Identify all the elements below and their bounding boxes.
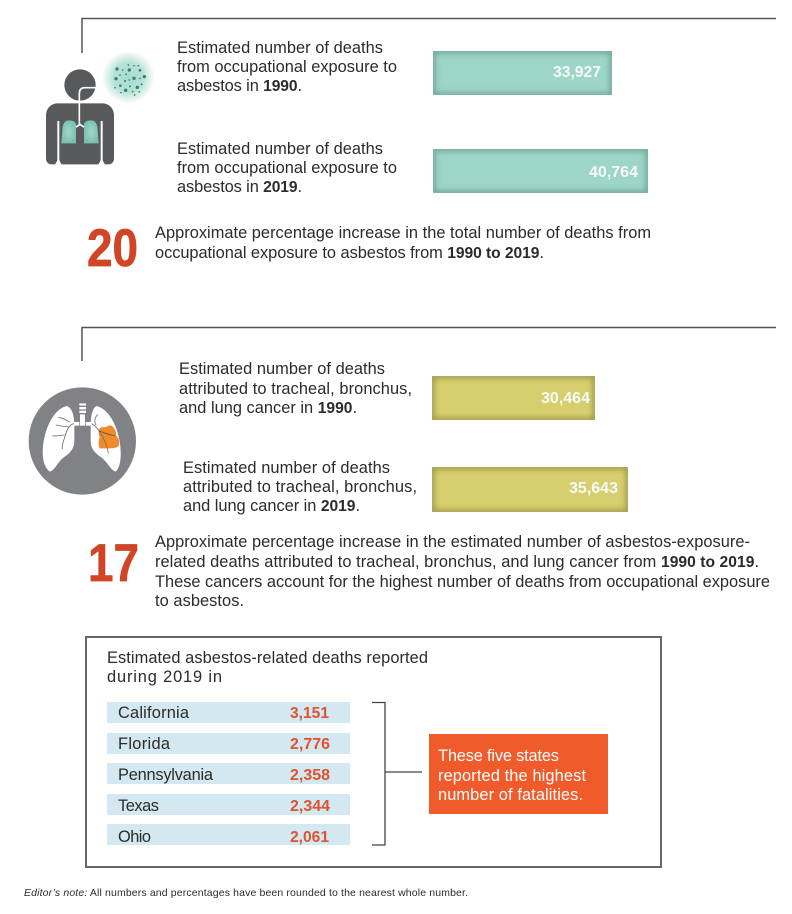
bracket connector: [372, 702, 422, 845]
row: Florida: [107, 733, 350, 754]
row: California: California: [118, 704, 190, 722]
row: Florida: 2,776: [290, 736, 330, 753]
text: cancer deaths in 2019: and lung cancer in 2019.: [183, 497, 360, 515]
bar: 40,764: 40,764: [589, 164, 638, 181]
text: deaths in 1990: asbestos in 1990.: [177, 77, 302, 95]
callout: reported the highest: [438, 767, 586, 785]
icon: person inhaling asbestos: [46, 51, 155, 165]
panel: state fatalities: [86, 637, 661, 867]
icon: lungs with tumor: [29, 387, 136, 495]
text: 17 percent increase: related deaths attributed to tracheal, bronchus, and lung cancer from 1990 to 2019.: [155, 553, 759, 571]
panel heading: [107, 649, 428, 686]
section 1 bracket line: [82, 18, 776, 53]
text: cancer deaths in 2019: [183, 459, 417, 515]
bar: 35,643: [432, 467, 628, 512]
text: deaths in 2019: [177, 140, 397, 196]
row: Ohio: Ohio: [118, 828, 151, 846]
text: deaths in 1990: Estimated number of deaths: [177, 39, 383, 57]
row: Pennsylvania: 2,358: [290, 767, 330, 784]
text: 20 percent increase: Approximate percentage increase in the total number of deaths from: [155, 224, 651, 242]
row: California: 3,151: [290, 705, 329, 722]
text: cancer deaths in 2019: Estimated number of deaths: [183, 459, 390, 477]
row: California: [107, 702, 350, 723]
section 2 bracket line: [82, 328, 776, 361]
text: 17 percent increase: [155, 533, 770, 610]
bar: 33,927: [433, 51, 612, 95]
big number 17: 17: [88, 534, 139, 593]
bar: 30,464: 30,464: [541, 390, 590, 407]
text: 17 percent increase: to asbestos.: [155, 592, 244, 610]
row: Texas: Texas: [118, 797, 159, 815]
text: deaths in 1990: from occupational exposure to: [177, 58, 397, 76]
bar: 35,643: 35,643: [569, 480, 618, 497]
text: 17 percent increase: These cancers account for the highest number of deaths from occupational exposure: [155, 573, 770, 591]
text: deaths in 2019: Estimated number of deaths: [177, 140, 383, 158]
text: deaths in 1990: [177, 39, 397, 95]
text: deaths in 2019: from occupational exposure to: [177, 159, 397, 177]
callout: number of fatalities.: [438, 786, 583, 804]
callout: [429, 734, 608, 814]
text: cancer deaths in 1990: [179, 360, 412, 417]
text: cancer deaths in 1990: Estimated number of deaths: [179, 360, 385, 378]
row: Ohio: 2,061: [290, 829, 329, 846]
row: Florida: Florida: [118, 735, 171, 753]
row: Ohio: [107, 824, 350, 846]
callout: These five states: [438, 747, 559, 765]
text: deaths in 2019: asbestos in 2019.: [177, 178, 302, 196]
text: cancer deaths in 2019: attributed to tracheal, bronchus,: [183, 478, 417, 496]
row: Pennsylvania: Pennsylvania: [118, 766, 214, 784]
panel heading: Estimated asbestos-related deaths reported: [107, 649, 428, 667]
big number 20: 20: [87, 219, 138, 278]
bar: 30,464: [432, 376, 595, 420]
row: Texas: [107, 794, 350, 815]
editor's note: Editor’s note: All numbers and percentages have been rounded to the nearest whole number.: [24, 887, 468, 899]
text: 17 percent increase: Approximate percentage increase in the estimated number of asbestos-exposure-: [155, 533, 750, 551]
text: 20 percent increase: [155, 224, 651, 262]
row: Pennsylvania: [107, 763, 350, 784]
bar: 40,764: [433, 149, 648, 193]
panel heading: during 2019 in: [107, 668, 222, 686]
text: 20 percent increase: occupational exposure to asbestos from 1990 to 2019.: [155, 244, 544, 262]
bar: 33,927: 33,927: [553, 64, 601, 81]
text: cancer deaths in 1990: and lung cancer in 1990.: [179, 399, 357, 417]
text: cancer deaths in 1990: attributed to tracheal, bronchus,: [179, 380, 412, 398]
row: Texas: 2,344: [290, 798, 330, 815]
